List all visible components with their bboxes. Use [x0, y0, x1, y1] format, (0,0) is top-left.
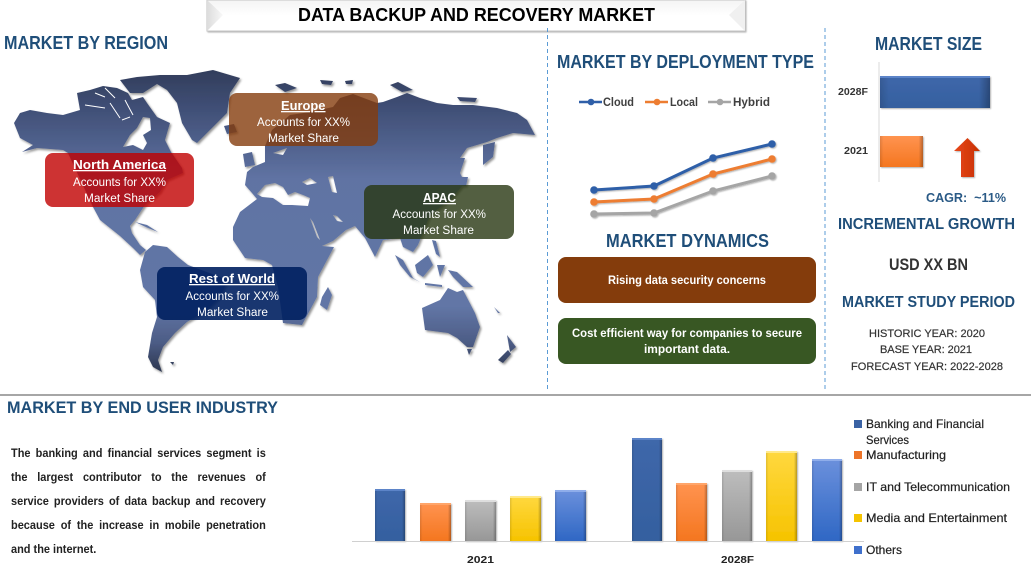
heading: market by region: MARKET BY REGION — [4, 32, 168, 53]
end user legend — [854, 417, 1010, 557]
end user legend: IT and Telecommunication — [866, 480, 1010, 494]
CAGR label: CAGR: ~11% — [926, 191, 1006, 205]
end user bar chart: 2028F — [721, 554, 755, 566]
callout: North America: North America — [73, 157, 167, 172]
heading: market by deployment type: MARKET BY DEPLOYMENT TYPE — [557, 52, 814, 72]
title banner — [207, 0, 745, 31]
bar: 2028F — [880, 76, 990, 108]
end user legend: Manufacturing — [866, 448, 946, 462]
end user bar chart: 2021 — [467, 554, 494, 566]
title text: DATA BACKUP AND RECOVERY MARKET — [298, 4, 656, 25]
group 2028F — [632, 438, 842, 541]
callout: APAC: APAC — [423, 190, 457, 205]
callout: North America — [45, 153, 194, 207]
line chart legend — [579, 97, 770, 109]
callout: Rest of World: Accounts for XX% — [186, 291, 279, 303]
driver box: cost — [558, 318, 816, 364]
study period list: BASE YEAR: 2021 — [880, 344, 972, 356]
line chart legend: Cloud — [603, 97, 634, 109]
callout: Rest of World — [157, 267, 307, 320]
driver box: cost: important data. — [644, 344, 730, 356]
heading: market dynamics: MARKET DYNAMICS — [606, 231, 769, 251]
paragraph: end user summary — [11, 446, 266, 556]
paragraph: end user summary: the largest contributor to the revenues of — [11, 470, 266, 484]
series: hybrid — [590, 172, 776, 218]
paragraph: end user summary: service providers of data backup and recovery — [11, 494, 266, 508]
paragraph: end user summary: and the internet. — [11, 542, 96, 556]
driver box: security — [558, 257, 816, 303]
study period list: FORECAST YEAR: 2022-2028 — [851, 361, 1003, 373]
world map — [14, 70, 535, 372]
callout: APAC: Market Share — [403, 225, 474, 237]
callout: Europe: Market Share — [268, 133, 339, 145]
callout: Europe: Europe — [281, 98, 326, 113]
callout: APAC — [364, 185, 514, 239]
market size bar chart — [838, 62, 990, 182]
callout: Europe: Accounts for XX% — [257, 117, 350, 129]
heading: market by end user industry: MARKET BY END USER INDUSTRY — [7, 398, 279, 417]
end user legend: Services — [866, 433, 909, 447]
driver box: security: Rising data security concerns — [608, 275, 766, 287]
market size bar chart: 2021 — [844, 145, 868, 157]
callout: Europe — [229, 93, 378, 146]
callout: APAC: Accounts for XX% — [392, 209, 486, 221]
end user legend: Media and Entertainment — [866, 511, 1008, 525]
heading: incremental growth: INCREMENTAL GROWTH — [838, 216, 1015, 233]
callout: Rest of World: Rest of World — [189, 271, 275, 286]
driver box: cost: Cost efficient way for companies to secure — [572, 328, 802, 340]
value: incremental growth: USD XX BN — [889, 256, 968, 274]
bar: 2021 — [880, 136, 923, 167]
line chart legend: Hybrid — [733, 97, 770, 109]
heading: market size: MARKET SIZE — [875, 34, 982, 54]
group 2021 — [375, 489, 586, 541]
series: cloud — [590, 140, 776, 194]
line chart — [590, 140, 776, 218]
growth arrow — [954, 138, 980, 177]
line chart legend: Local — [670, 97, 698, 109]
callout: North America: Market Share — [84, 193, 155, 205]
callout: North America: Accounts for XX% — [73, 177, 166, 189]
study period list: HISTORIC YEAR: 2020 — [869, 328, 985, 340]
paragraph: end user summary: because of the increase in mobile penetration — [11, 518, 266, 532]
study period list — [851, 328, 1003, 373]
paragraph: end user summary: The banking and financial services segment is — [11, 446, 266, 460]
callout: Rest of World: Market Share — [197, 307, 268, 319]
end user legend: Others — [866, 543, 902, 557]
series: local — [590, 155, 776, 206]
end user legend: Banking and Financial — [866, 417, 984, 431]
heading: market study period: MARKET STUDY PERIOD — [842, 294, 1015, 311]
end user bar chart — [352, 438, 864, 566]
market size bar chart: 2028F — [838, 86, 869, 98]
